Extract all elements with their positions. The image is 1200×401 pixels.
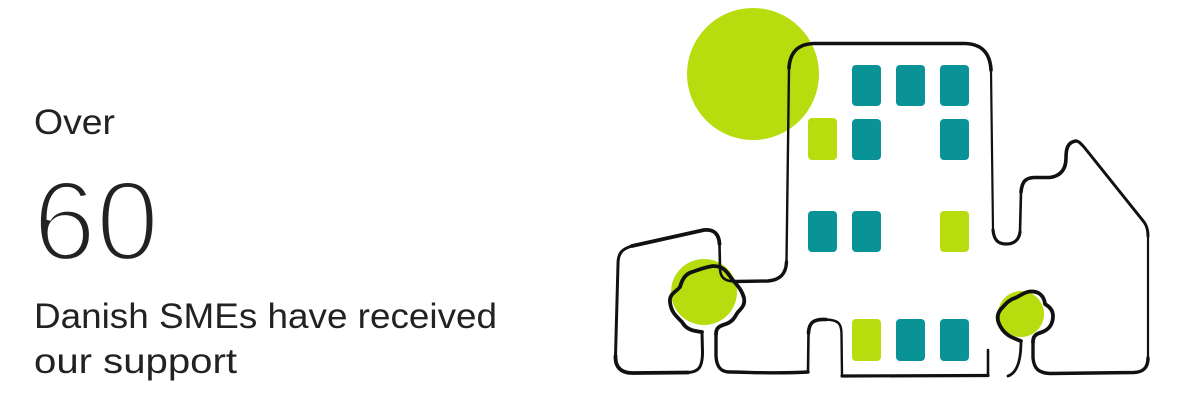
icon: right tree foliage [998, 291, 1044, 337]
illustration: buildings and trees [615, 8, 1148, 376]
outline: continuous line drawing [615, 44, 1148, 376]
label: Over: Over [34, 103, 115, 142]
description line 2: our support [34, 342, 237, 381]
icon: lime sun [687, 8, 819, 140]
icon: left tree foliage [671, 259, 737, 325]
description line 1: Danish SMEs have received [34, 297, 497, 336]
text block: statistic [33, 103, 497, 381]
windows: teal [808, 65, 969, 361]
windows: lime [808, 118, 969, 361]
big number: 60: 60 [33, 158, 159, 284]
